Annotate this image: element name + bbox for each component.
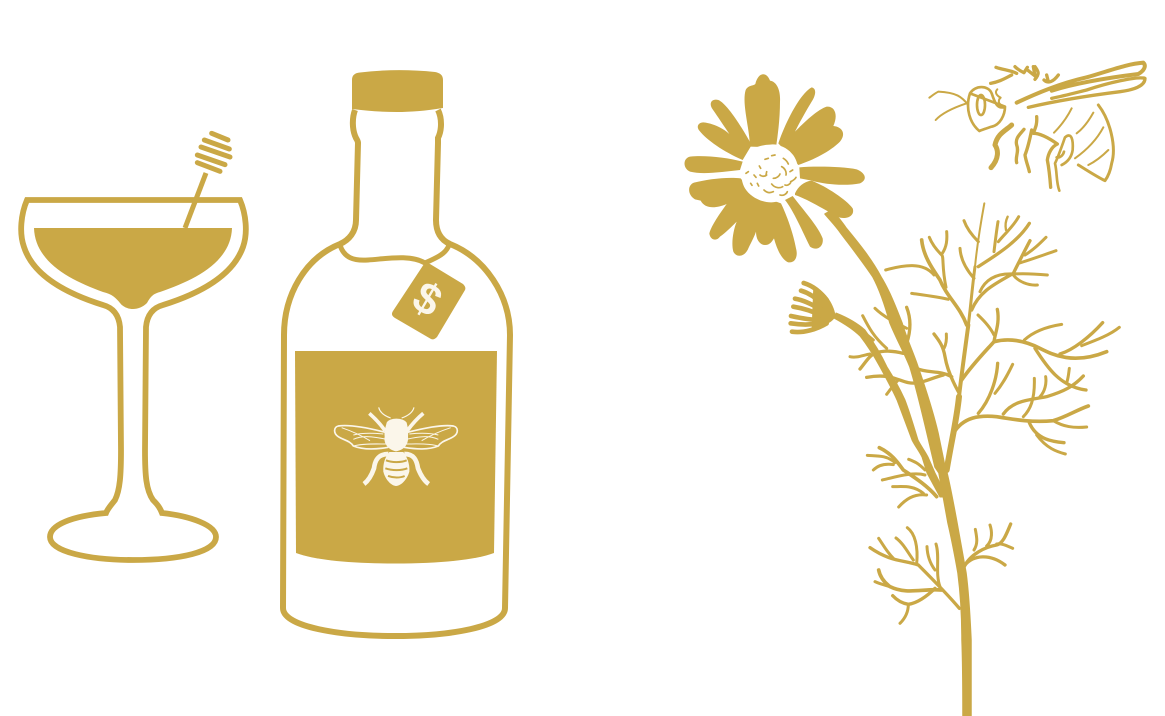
fern branches upper <box>850 203 1119 470</box>
flower centre <box>741 144 798 202</box>
front legs <box>369 413 423 431</box>
eye <box>977 95 985 115</box>
neck squiggle <box>996 89 1001 104</box>
honey dipper head <box>197 133 230 171</box>
abdomen outline <box>1078 105 1113 181</box>
antennae <box>379 407 414 418</box>
left wing veins <box>342 428 387 446</box>
legs <box>991 125 1012 168</box>
head <box>968 87 1005 131</box>
abdomen lines <box>1054 108 1108 165</box>
abdomen stripes <box>385 460 407 477</box>
glass outline <box>21 200 246 560</box>
flower bud <box>791 283 836 332</box>
icon: flying bee <box>929 63 1145 191</box>
icon: bottle <box>283 70 510 636</box>
main stem <box>825 210 971 716</box>
hind legs <box>364 454 429 484</box>
cocktail liquid <box>34 228 232 309</box>
fur <box>991 67 1058 83</box>
fern branches lower <box>867 448 1013 623</box>
bottle label <box>295 351 497 564</box>
price tag <box>392 263 465 339</box>
bottle cap <box>352 70 443 112</box>
right wing veins <box>406 428 451 446</box>
honey dipper stick <box>185 173 206 228</box>
abdomen <box>383 452 409 486</box>
right wing <box>404 426 457 449</box>
hindwing <box>1028 78 1145 107</box>
icon: bee on label <box>335 407 457 486</box>
icon: chamomile plant <box>684 74 1119 716</box>
centre seed marks <box>746 155 796 195</box>
dollar sign: $ <box>404 272 450 327</box>
bottle outline <box>283 110 510 636</box>
neck collar <box>340 245 449 263</box>
antennae <box>929 92 968 120</box>
icon: coupe glass <box>21 133 246 560</box>
forewing <box>1017 63 1145 103</box>
daisy flower <box>684 74 865 262</box>
thorax <box>384 419 408 451</box>
second stem from bud <box>834 313 947 497</box>
left wing <box>335 426 388 449</box>
petals <box>684 74 865 262</box>
